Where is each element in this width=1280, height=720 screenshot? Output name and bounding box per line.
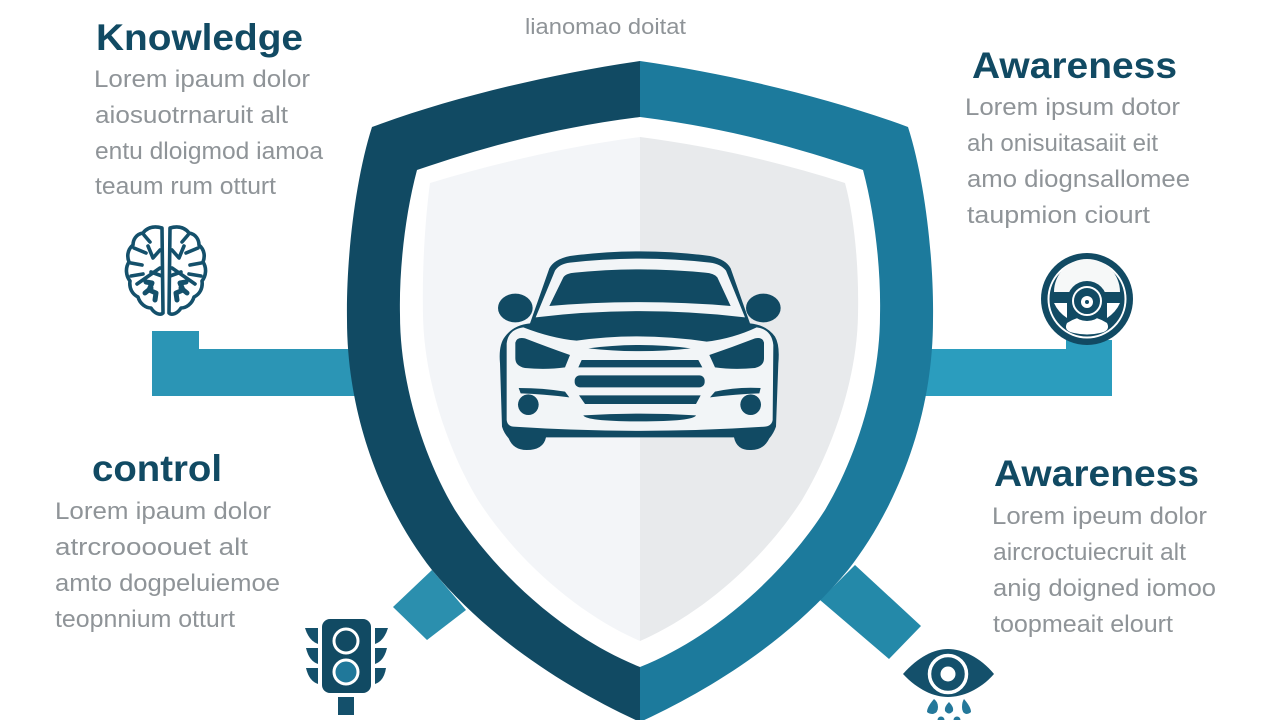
- text block: Awareness top: [965, 94, 1190, 229]
- text block: Awareness bottom: toopmeait elourt: [993, 611, 1173, 638]
- shield inner white: [400, 117, 880, 667]
- heading: Knowledge: Knowledge: [96, 17, 303, 58]
- icon: brain: [126, 227, 206, 314]
- text block: Awareness top: amo diognsallomee: [967, 166, 1190, 193]
- text block: control: atrcroooouet alt: [55, 534, 248, 561]
- icon: eye with drops: [903, 649, 994, 720]
- text block: Awareness bottom: Lorem ipeum dolor: [992, 503, 1207, 530]
- text block: Awareness bottom: aircroctuiecruit alt: [993, 539, 1186, 566]
- icon: car: [498, 251, 781, 450]
- heading: control: control: [92, 448, 222, 489]
- connector: right: [910, 340, 1112, 396]
- text block: control: amto dogpeluiemoe: [55, 570, 280, 597]
- text block: Awareness bottom: anig doigned iomoo: [993, 575, 1216, 602]
- text block: Knowledge: teaum rum otturt: [95, 173, 276, 200]
- shield outer right half: [640, 61, 933, 720]
- text block: Knowledge: Lorem ipaum dolor: [94, 66, 310, 93]
- connector: left: [152, 331, 370, 396]
- text block: Knowledge: [94, 66, 324, 200]
- text block: Knowledge: aiosuotrnaruit alt: [95, 102, 288, 129]
- shield: [347, 61, 933, 720]
- text block: Knowledge: entu dloigmod iamoa: [95, 138, 324, 165]
- top caption: lianomao doitat: [525, 14, 686, 39]
- connector: bottom left: [393, 570, 466, 640]
- text block: Awareness bottom: [992, 503, 1216, 638]
- connector: bottom right: [820, 565, 921, 659]
- icon: traffic light: [305, 619, 388, 715]
- text block: Awareness top: ah onisuitasaiit eit: [967, 130, 1158, 157]
- text block: Awareness top: taupmion ciourt: [967, 202, 1150, 229]
- heading: Awareness bottom: Awareness: [994, 453, 1199, 494]
- text block: control: Lorem ipaum dolor: [55, 498, 271, 525]
- text block: control: [55, 498, 280, 633]
- shield panel right: [640, 137, 858, 641]
- text block: Awareness top: Lorem ipsum dotor: [965, 94, 1180, 121]
- icon: steering wheel: [1041, 253, 1133, 345]
- text block: control: teopnnium otturt: [55, 606, 235, 633]
- shield panel left: [423, 137, 640, 641]
- heading: Awareness top: Awareness: [972, 45, 1177, 86]
- shield outer left half: [347, 61, 640, 720]
